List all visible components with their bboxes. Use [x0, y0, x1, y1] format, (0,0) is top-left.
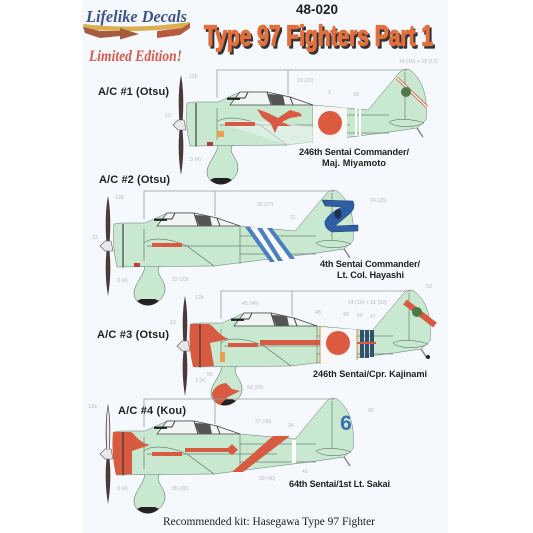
aircraft 3: 3 (4) [195, 378, 206, 384]
white gaps between stripes [249, 227, 295, 262]
aircraft 2 caption: 4th Sentai Commander/ [320, 259, 420, 269]
aircraft 1 caption: 246th Sentai Commander/ [299, 147, 409, 157]
title [204, 20, 435, 55]
aircraft 4: 42 [368, 408, 374, 414]
aircraft 2: 12b [115, 195, 124, 201]
aircraft 3: 47 [370, 314, 376, 320]
aircraft 3: 54 (55) [247, 385, 264, 391]
white band [292, 440, 296, 463]
aircraft 4: 41 [302, 469, 308, 475]
tail emblem [322, 200, 358, 232]
red cowl [189, 324, 229, 367]
dark bands [360, 330, 374, 358]
logo: Lifelike Decals: Lifelike Decals [85, 7, 187, 26]
eagle emblem [257, 109, 302, 133]
red cowl [112, 432, 150, 475]
aircraft 3: 48 [315, 310, 321, 316]
aircraft 3: 56 [207, 372, 213, 378]
aircraft 4 caption: 64th Sentai/1st Lt. Sakai [289, 479, 390, 489]
wing stripe [225, 122, 255, 126]
paper decal sheet [82, 0, 448, 533]
aircraft 2 [92, 190, 387, 306]
tail stripe [405, 302, 435, 325]
aircraft 4: 3 (4) [117, 486, 128, 492]
fuselage stripe [260, 340, 320, 345]
hinomaru [318, 111, 342, 135]
rear fuselage white band [320, 327, 357, 364]
aircraft 3: 13 [170, 320, 176, 326]
aircraft 3 [170, 284, 435, 406]
aircraft 2: 24 (25) [370, 198, 387, 204]
aircraft 1: 13 [165, 113, 171, 119]
aircraft 1: 18 [353, 92, 359, 98]
aircraft 1 caption [299, 147, 409, 168]
aircraft 2: 22 (23) [172, 277, 189, 283]
aircraft 2: 26 (27) [257, 202, 274, 208]
aircraft 3: 12b [195, 295, 204, 301]
aircraft 2 caption: Lt. Col. Hayashi [337, 270, 404, 280]
recommended kit note: Recommended kit: Hasegawa Type 97 Fighter [163, 514, 375, 528]
aircraft 2: 31 [290, 215, 296, 221]
blue fuselage stripes [245, 227, 295, 262]
catalogue number: 48-020 [296, 2, 338, 17]
logo: Lifelike Decals [83, 7, 190, 65]
aircraft 2 caption [320, 259, 420, 280]
red arrow [185, 444, 238, 455]
white underside [217, 121, 314, 145]
title: Type 97 Fighters Part 1 [206, 23, 435, 55]
logo: Lifelike Decals: Limited Edition! [88, 48, 182, 65]
aircraft 3: 45 (46) [242, 301, 259, 307]
aircraft 1: 14 (16) + 15 (17) [399, 59, 438, 65]
aircraft 1: 3 (4) [190, 157, 201, 163]
aircraft 2 label: A/C #2 (Otsu) [99, 174, 170, 186]
aircraft 3: 50 [357, 313, 363, 319]
aircraft 1: 19 (20) [297, 78, 314, 84]
aircraft 1 [165, 59, 438, 184]
aircraft 4: 39 (40) [259, 476, 276, 482]
aircraft 1 label: A/C #1 (Otsu) [98, 86, 169, 98]
aircraft 3: 53 [426, 284, 432, 290]
aircraft 4: 37 (38) [255, 419, 272, 425]
aircraft 3: 14 (16) + 51 (52) [348, 300, 387, 306]
pale upper propeller blade [107, 407, 109, 449]
aircraft 4: 12a [88, 404, 97, 410]
title: Type 97 Fighters Part 1 [204, 20, 433, 52]
aircraft 4 label: A/C #4 (Kou) [118, 405, 186, 417]
aircraft 4: 34 [288, 423, 294, 429]
aircraft 1: 2 [328, 90, 331, 96]
aircraft 1: 12b [189, 74, 198, 80]
diagonal band [232, 436, 290, 472]
tail number: 6 [340, 412, 352, 435]
aircraft 1 caption: Maj. Miyamoto [322, 158, 386, 168]
aircraft 2: 3 (4) [117, 278, 128, 284]
aircraft 4 [88, 398, 374, 514]
tail emblem [397, 78, 427, 107]
aircraft 2: 13 [92, 235, 98, 241]
rear fuselage white band [313, 106, 347, 143]
hinomaru [326, 331, 350, 355]
aircraft 3 caption: 246th Sentai/Cpr. Kajinami [313, 369, 427, 379]
aircraft 4: 35 (36) [172, 486, 189, 492]
aircraft 3: 49 [343, 312, 349, 318]
aircraft 3 label: A/C #3 (Otsu) [97, 329, 169, 341]
